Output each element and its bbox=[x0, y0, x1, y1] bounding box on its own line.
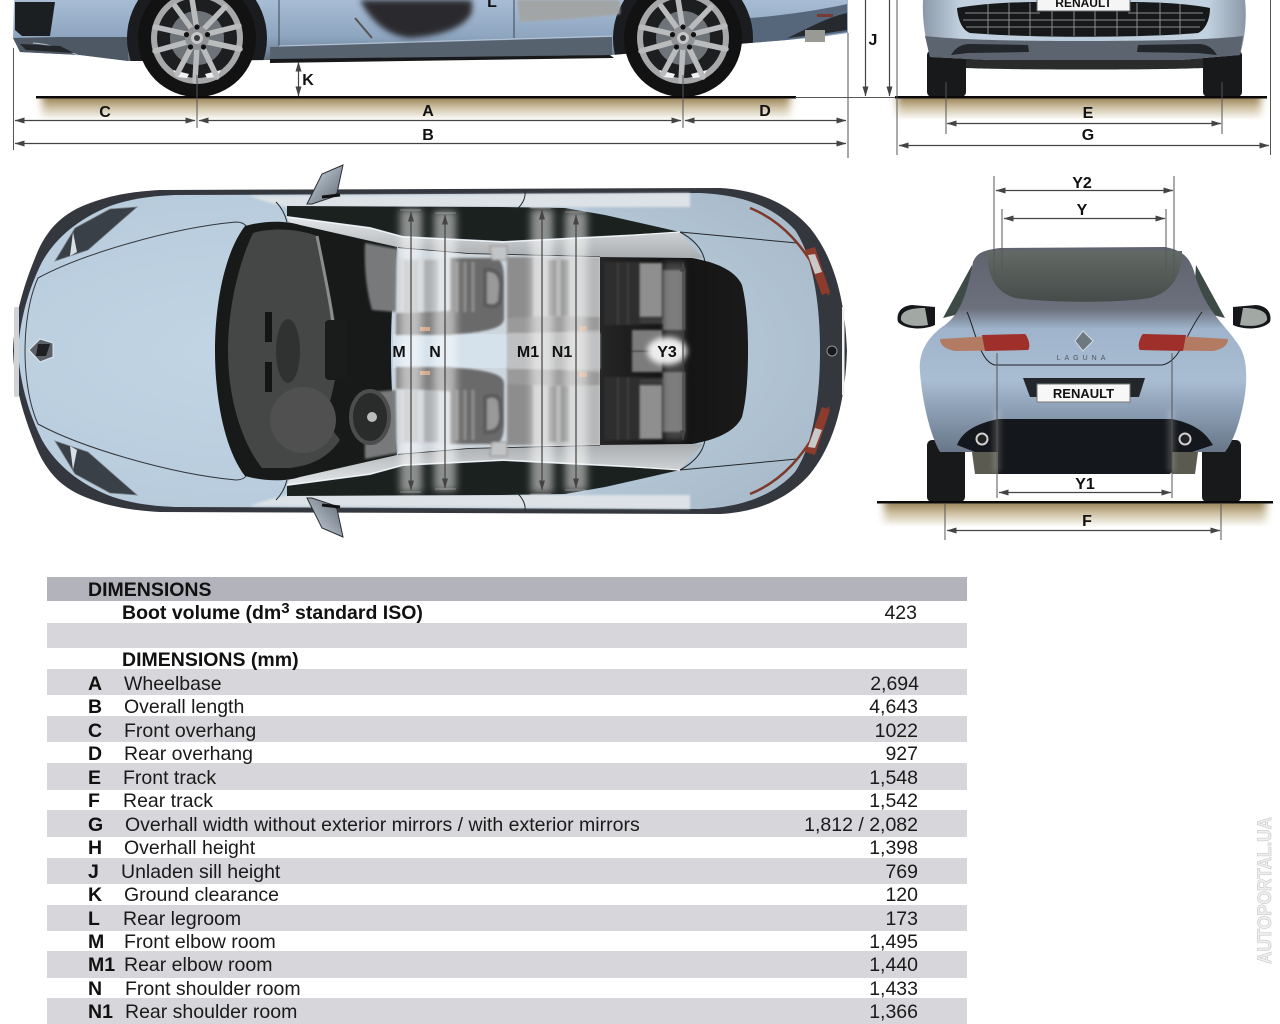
arrow: D bbox=[685, 120, 846, 122]
windscreen bbox=[215, 222, 397, 480]
row A: A bbox=[88, 673, 102, 695]
table heading: DIMENSIONS bbox=[88, 579, 212, 601]
row E: Front track bbox=[123, 767, 216, 789]
row E: 1,548 bbox=[869, 767, 918, 789]
left door mirror bbox=[898, 305, 935, 328]
right exhaust bbox=[1180, 434, 1190, 444]
label: N1: N1 bbox=[552, 344, 572, 361]
row N1 bbox=[88, 1001, 918, 1023]
arrow: H bbox=[888, 0, 890, 96]
row N bbox=[88, 978, 918, 1000]
front wheel: side view bbox=[138, 0, 256, 97]
row D bbox=[88, 743, 918, 765]
licence plate: front bbox=[1037, 0, 1130, 11]
row N: 1,433 bbox=[869, 978, 918, 1000]
label: A: A bbox=[422, 103, 434, 120]
rear bench centre bbox=[507, 333, 600, 369]
ground shadow: rear view bbox=[884, 503, 1266, 527]
dimension lines: front view bbox=[897, 0, 1270, 155]
ground line: rear view bbox=[877, 501, 1273, 504]
translucent measure bands bbox=[400, 209, 587, 493]
row B: 4,643 bbox=[869, 696, 918, 718]
subheading: DIMENSIONS (mm) bbox=[122, 649, 299, 671]
row K: 120 bbox=[885, 884, 918, 906]
mirror glass bbox=[901, 308, 1267, 326]
arrow: K bbox=[298, 62, 300, 96]
label: D: D bbox=[759, 103, 771, 120]
label: Y2: Y2 bbox=[1072, 175, 1092, 192]
row B: Overall length bbox=[124, 696, 244, 718]
body: front view bbox=[923, 0, 1246, 60]
row F: 1,542 bbox=[869, 790, 918, 812]
lower bumper bbox=[957, 419, 1213, 474]
side windows bbox=[943, 265, 1225, 318]
row L: Rear legroom bbox=[123, 908, 241, 930]
right door mirror bbox=[1233, 305, 1270, 328]
row J: 769 bbox=[885, 861, 918, 883]
rear light strip bbox=[842, 307, 844, 395]
right tail light bbox=[1139, 334, 1228, 351]
boot volume row: 3 bbox=[281, 600, 290, 617]
rear seats and rear window upper bbox=[507, 257, 748, 351]
label: Y1: Y1 bbox=[1075, 476, 1095, 493]
rear view: car bbox=[877, 247, 1273, 527]
bumper lower: front view bbox=[925, 36, 1243, 60]
rear badge bbox=[827, 346, 837, 356]
boot volume row: 423 bbox=[884, 602, 917, 624]
label: E: E bbox=[1083, 105, 1094, 122]
underbody: front view bbox=[966, 58, 1203, 70]
row L: 173 bbox=[885, 908, 918, 930]
row D: 927 bbox=[885, 743, 918, 765]
row M bbox=[88, 931, 918, 953]
side view: car bbox=[13, 0, 848, 120]
row J bbox=[88, 861, 918, 883]
row A bbox=[88, 673, 919, 695]
label: K: K bbox=[302, 72, 314, 89]
label: J: J bbox=[869, 32, 877, 49]
ground shadow: front view bbox=[897, 98, 1261, 120]
row A: 2,694 bbox=[870, 673, 919, 695]
row F bbox=[88, 790, 918, 812]
front seats upper bbox=[365, 243, 507, 335]
muffler shields bbox=[972, 452, 1198, 474]
boot volume row bbox=[122, 600, 917, 624]
ground line: side view bbox=[36, 96, 796, 98]
arrow: A bbox=[199, 120, 681, 122]
model badge: LAGUNA bbox=[1057, 355, 1109, 362]
dimension lines: side view bbox=[14, 0, 895, 158]
row M1: M1 bbox=[88, 954, 115, 976]
left exhaust bbox=[976, 434, 988, 444]
label: Y3: Y3 bbox=[657, 344, 677, 361]
row C: 1022 bbox=[875, 720, 918, 742]
row F: Rear track bbox=[123, 790, 213, 812]
label: N: N bbox=[429, 344, 441, 361]
top view: car bbox=[13, 165, 847, 537]
seat belt buckles bbox=[420, 326, 587, 377]
licence plate: rear bbox=[1037, 384, 1130, 402]
arrow: G bbox=[899, 144, 1269, 146]
body: rear view bbox=[920, 247, 1246, 452]
label: M1: M1 bbox=[517, 344, 539, 361]
row N1: Rear shoulder room bbox=[125, 1001, 297, 1023]
rear window bbox=[987, 251, 1182, 302]
arrow: C bbox=[15, 120, 195, 122]
tyres: front view bbox=[927, 50, 1242, 97]
car body: side view bbox=[13, 0, 848, 63]
Y3 band bbox=[664, 262, 684, 440]
front view: car bbox=[895, 0, 1267, 120]
boot volume row: standard ISO) bbox=[290, 602, 423, 624]
row N: N bbox=[88, 978, 102, 1000]
cabin light floor bbox=[393, 248, 600, 454]
row A: Wheelbase bbox=[124, 673, 222, 695]
Y3 label halo bbox=[647, 337, 687, 365]
left tail light red bbox=[982, 334, 1029, 351]
row M1: 1,440 bbox=[869, 954, 918, 976]
row F: F bbox=[88, 790, 100, 812]
dimension lines: top view bbox=[392, 210, 683, 490]
lower half details bbox=[25, 351, 830, 537]
plate recess bbox=[1023, 378, 1145, 397]
front seats lower bbox=[365, 367, 507, 459]
row H: H bbox=[88, 837, 102, 859]
row K: Ground clearance bbox=[124, 884, 279, 906]
row C: Front overhang bbox=[124, 720, 256, 742]
arrow: M bbox=[410, 212, 412, 490]
row M: M bbox=[88, 931, 104, 953]
row N: Front shoulder room bbox=[125, 978, 301, 1000]
body panels bbox=[18, 193, 820, 509]
arrow: Y bbox=[1004, 218, 1165, 220]
right tail light red bbox=[1139, 334, 1186, 351]
row C: C bbox=[88, 720, 102, 742]
row G: 1,812 / 2,082 bbox=[804, 814, 918, 836]
label: C: C bbox=[99, 104, 111, 121]
label: Y: Y bbox=[1077, 202, 1088, 219]
row H: Overhall height bbox=[124, 837, 256, 859]
fog vents bbox=[951, 44, 1217, 55]
dashboard bbox=[228, 230, 347, 468]
rear logo bbox=[1075, 331, 1093, 351]
outer body rim bbox=[13, 188, 847, 514]
row M: Front elbow room bbox=[124, 931, 276, 953]
arrow: Y1 bbox=[999, 492, 1171, 494]
row M: 1,495 bbox=[869, 931, 918, 953]
row H bbox=[88, 837, 918, 859]
grille bbox=[957, 2, 1210, 37]
label: F: F bbox=[1082, 513, 1092, 530]
arrow: Y3 bbox=[682, 262, 684, 440]
row J: J bbox=[88, 861, 99, 883]
tyres: rear view bbox=[927, 440, 1241, 502]
row K bbox=[88, 884, 918, 906]
dimension lines: rear view bbox=[945, 175, 1221, 540]
row G bbox=[88, 814, 918, 836]
arrow: J bbox=[864, 0, 866, 96]
arrow: B bbox=[15, 142, 846, 144]
cabin centre strip bbox=[393, 334, 507, 368]
row D: D bbox=[88, 743, 102, 765]
row G: Overhall width without exterior mirrors / with exterior mirrors bbox=[125, 814, 640, 836]
arrow: E bbox=[947, 122, 1221, 124]
watermark: AUTOPORTAL.UA bbox=[1255, 817, 1276, 964]
arrow: M1 bbox=[541, 210, 543, 490]
label: B: B bbox=[422, 127, 434, 144]
ground shadow: side view bbox=[42, 98, 790, 120]
dimensions table bbox=[47, 577, 967, 1024]
arrow: Y2 bbox=[996, 190, 1173, 192]
row E: E bbox=[88, 767, 101, 789]
upper half details bbox=[25, 165, 830, 351]
licence plate: rear: RENAULT bbox=[1053, 386, 1114, 401]
steering wheel bbox=[351, 391, 389, 443]
ground line: front view bbox=[895, 96, 1267, 98]
row L bbox=[88, 908, 918, 930]
arrow: F bbox=[947, 530, 1220, 532]
row B: B bbox=[88, 696, 102, 718]
front grille strip bbox=[14, 307, 19, 397]
label: G: G bbox=[1082, 127, 1094, 144]
row D: Rear overhang bbox=[124, 743, 253, 765]
row G: G bbox=[88, 814, 103, 836]
row B bbox=[88, 696, 918, 718]
row L: L bbox=[88, 908, 100, 930]
label: M: M bbox=[392, 344, 406, 361]
row K: K bbox=[88, 884, 102, 906]
row E bbox=[88, 767, 918, 789]
translucent measure bands rear bbox=[994, 410, 1174, 472]
arrow: N1 bbox=[575, 215, 577, 488]
row N1: 1,366 bbox=[869, 1001, 918, 1023]
boot volume row: Boot volume (dm bbox=[122, 602, 281, 624]
row M1 bbox=[88, 954, 918, 976]
row C bbox=[88, 720, 918, 742]
row J: Unladen sill height bbox=[121, 861, 281, 883]
arrow: N bbox=[444, 215, 446, 488]
bonnet logo bbox=[29, 339, 53, 362]
row M1: Rear elbow room bbox=[124, 954, 272, 976]
rear seats and rear window lower bbox=[507, 351, 748, 445]
left tail light bbox=[940, 334, 1029, 351]
boot lid line bbox=[967, 312, 1202, 365]
table row bands bbox=[47, 577, 967, 1024]
row N1: N1 bbox=[88, 1001, 113, 1023]
row H: 1,398 bbox=[869, 837, 918, 859]
rear wheel: side view bbox=[624, 0, 742, 97]
